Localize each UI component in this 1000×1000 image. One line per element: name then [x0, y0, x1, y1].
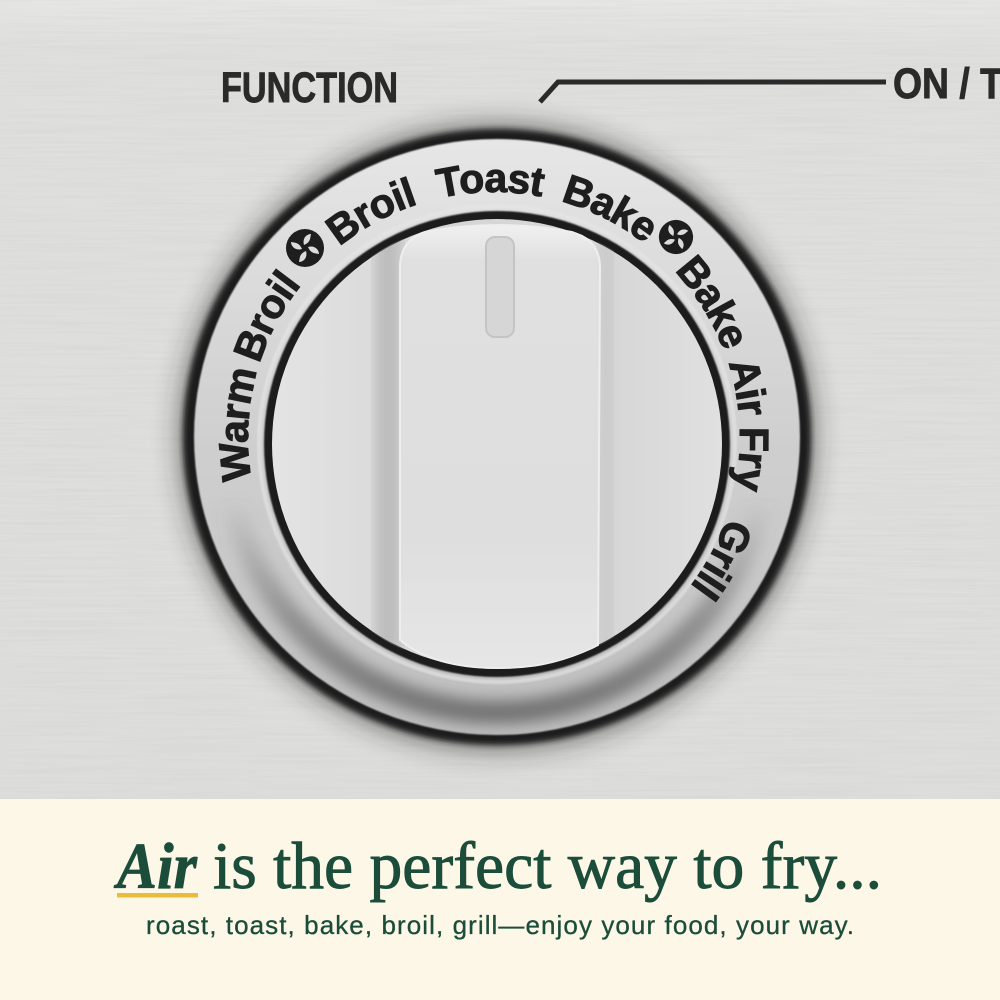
- icon: fan right: [652, 213, 700, 261]
- label: Broil: Broil: [233, 268, 300, 362]
- connector line to ON / TIMER: [540, 82, 886, 102]
- icon: fan left: [286, 229, 324, 267]
- function dial: [161, 105, 833, 769]
- panel: stainless steel oven photo: [0, 0, 1000, 800]
- label: Fan Bake: Bake: [676, 254, 742, 348]
- handle side shadow left: [376, 220, 400, 670]
- inner ring highlight: [259, 206, 735, 682]
- label: Toast: Toast: [434, 165, 546, 197]
- yellow underline: [117, 893, 198, 898]
- handle side shadow right: [600, 230, 612, 660]
- panel: caption band: [0, 799, 1000, 1000]
- label: Air Fry: Air Fry: [728, 363, 769, 493]
- knob body: [272, 219, 722, 669]
- handle grip: [400, 225, 600, 668]
- label: Grill: Grill: [691, 522, 750, 602]
- heading: is the perfect way to fry...: [213, 829, 882, 903]
- handle indicator slot: [486, 237, 514, 337]
- heading emphasis: Air: Air: [113, 830, 198, 903]
- inner black ring: [264, 211, 730, 677]
- label: Warm: Warm: [218, 369, 257, 483]
- dial dark bezel: [183, 129, 811, 745]
- label: Bake: Bake: [562, 174, 654, 240]
- dial metal ring: [194, 139, 800, 735]
- dial labels: [218, 165, 769, 602]
- dial outer shadow: [181, 125, 813, 749]
- knob handle: [376, 220, 612, 670]
- ring lower shading: [227, 176, 767, 712]
- label: Fan Broil: Broil: [324, 176, 416, 246]
- subheading: roast, toast, bake, broil, grill—enjoy your food, your way.: [146, 910, 854, 940]
- label: FUNCTION: FUNCTION: [221, 64, 398, 112]
